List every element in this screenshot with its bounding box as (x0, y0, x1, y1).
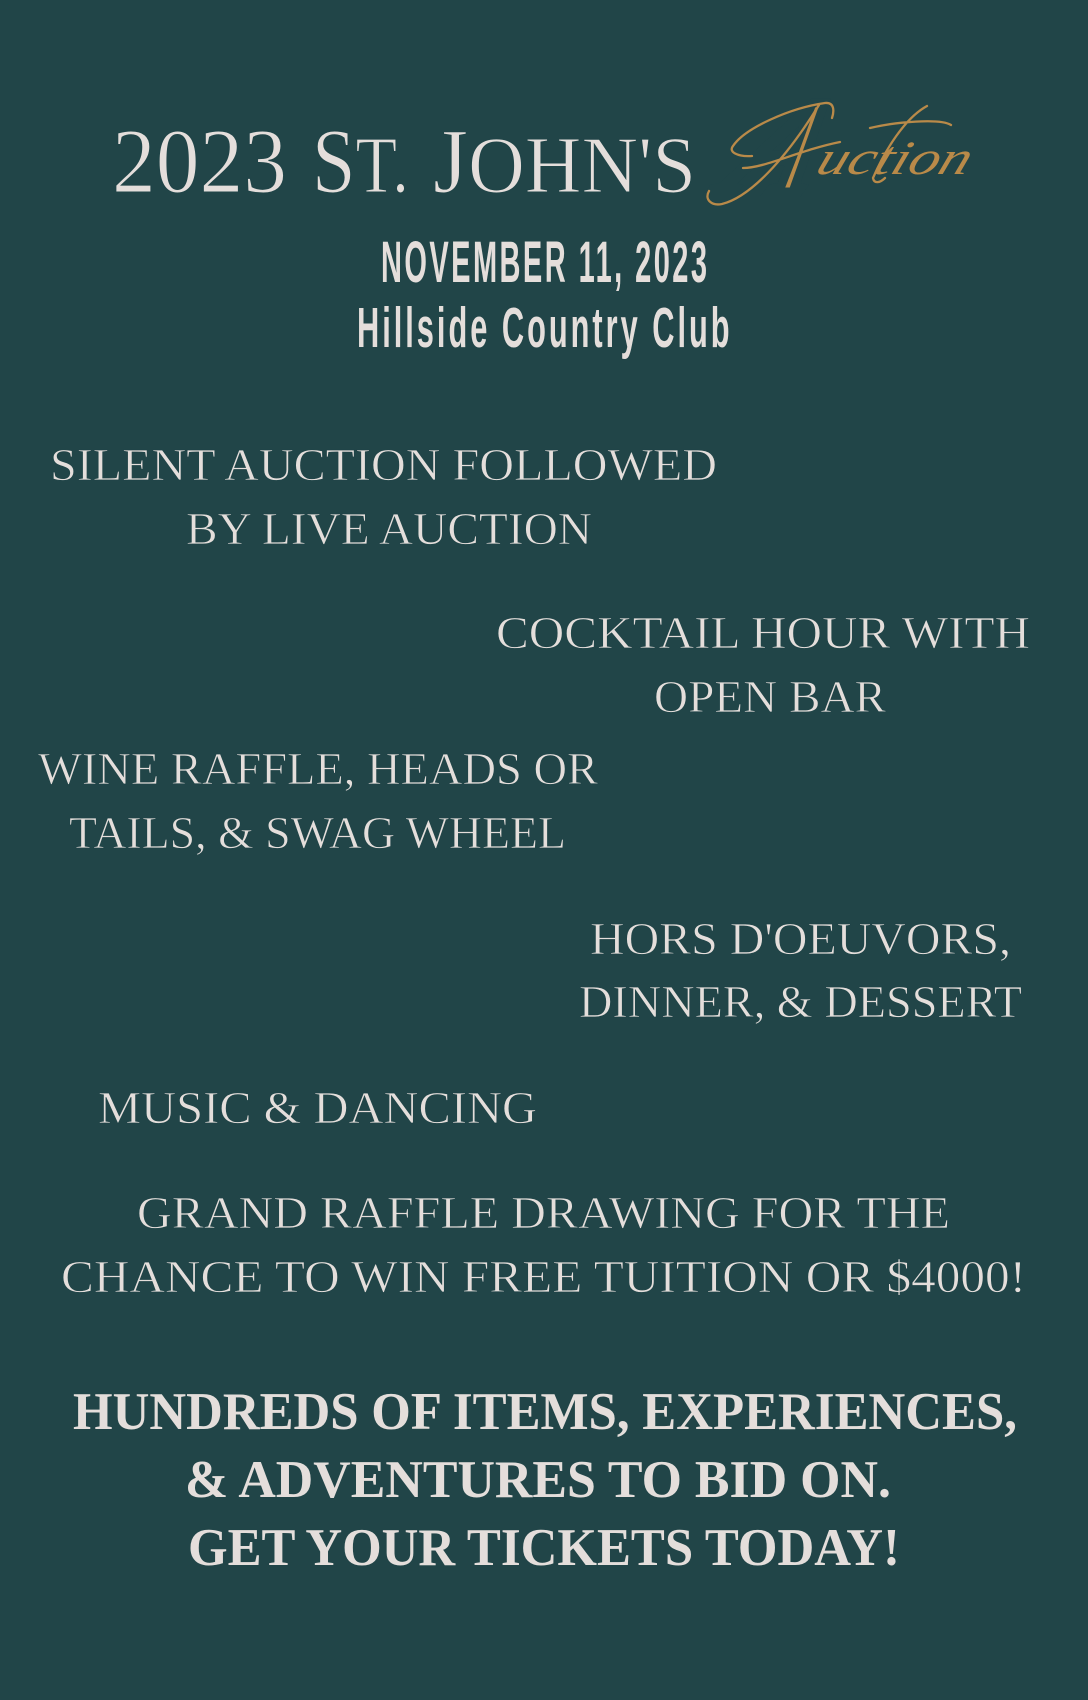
text block: cocktail hour (496, 607, 1030, 722)
text block: dinner (579, 913, 1022, 1027)
text block: dinner: HORS D'OEUVORS, (590, 913, 1011, 964)
call to action: HUNDREDS OF ITEMS, EXPERIENCES, (73, 1383, 1017, 1441)
text block: cocktail hour: COCKTAIL HOUR WITH (496, 607, 1030, 658)
text block: silent auction (50, 439, 717, 554)
text block: wine raffle: TAILS, & SWAG WHEEL (69, 807, 566, 858)
call to action (73, 1383, 1017, 1577)
title: 2023 St. John's (112, 110, 696, 212)
text block: silent auction: SILENT AUCTION FOLLOWED (50, 439, 717, 490)
title: script Auction: A (693, 73, 867, 222)
date: NOVEMBER 11, 2023 (381, 229, 707, 295)
title: script Auction: uction (810, 131, 982, 185)
venue: Hillside Country Club (357, 296, 730, 359)
text block: grand raffle: GRAND RAFFLE DRAWING FOR THE (137, 1187, 950, 1238)
title: 2023 St. John's: ST. (312, 110, 409, 212)
text block: music: MUSIC & DANCING (98, 1082, 537, 1133)
title: script Auction (693, 73, 982, 222)
text block: wine raffle (38, 743, 598, 858)
text block: grand raffle: CHANCE TO WIN FREE TUITION OR $4000! (61, 1251, 1026, 1302)
title (112, 73, 982, 222)
text block: silent auction: BY LIVE AUCTION (186, 503, 592, 554)
title: 2023 St. John's: 2023 (112, 110, 287, 212)
call to action: GET YOUR TICKETS TODAY! (188, 1519, 900, 1577)
title: 2023 St. John's: JOHN'S (433, 110, 696, 212)
text block: wine raffle: WINE RAFFLE, HEADS OR (38, 743, 598, 794)
call to action: & ADVENTURES TO BID ON. (185, 1451, 891, 1509)
text block: grand raffle (61, 1187, 1026, 1302)
text block: dinner: DINNER, & DESSERT (579, 976, 1022, 1027)
text block: cocktail hour: OPEN BAR (654, 671, 886, 722)
